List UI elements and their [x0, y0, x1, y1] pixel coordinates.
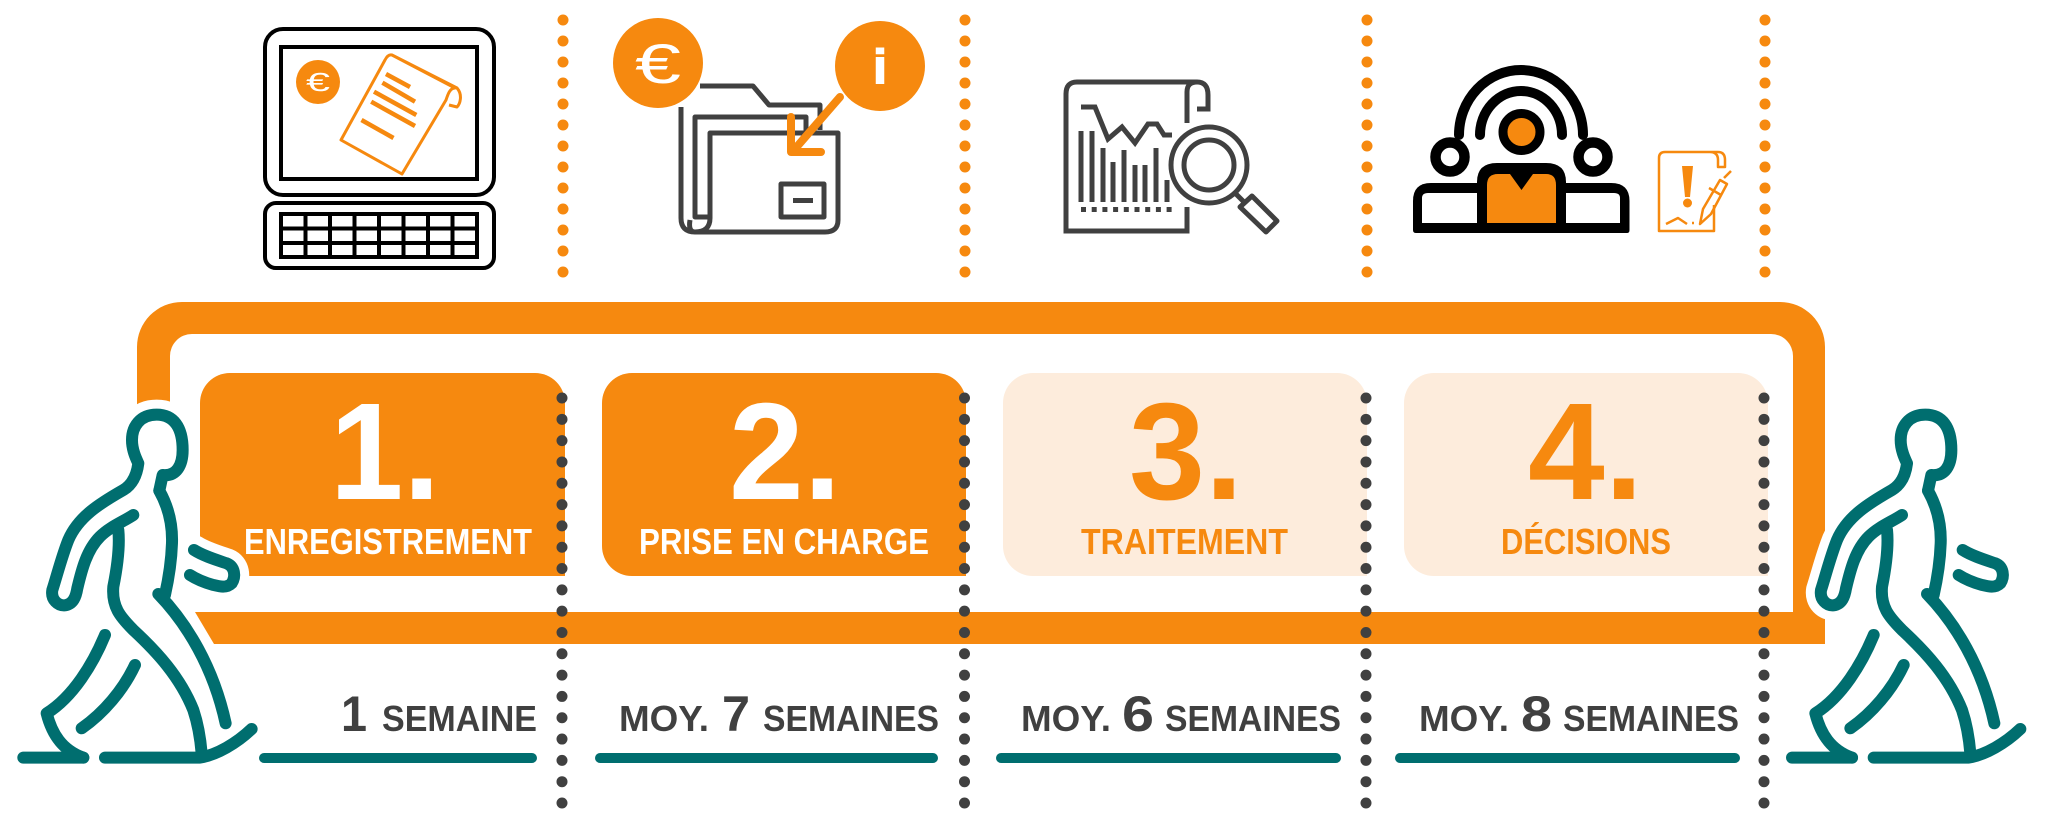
duration 2: SEMAINES: [763, 698, 939, 739]
icon: signed document: [1659, 152, 1731, 231]
walker left: [23, 415, 252, 758]
duration 2: 7: [722, 686, 750, 742]
duration 4: 8: [1521, 686, 1552, 742]
icon: computer with invoice: [265, 29, 494, 268]
duration 1: SEMAINE: [382, 698, 537, 739]
icon: folder with euro and info: [613, 18, 925, 232]
duration 3: MOY.: [1021, 698, 1111, 739]
timeline bars: [259, 753, 1740, 763]
duration 3: SEMAINES: [1165, 698, 1341, 739]
icon: folder with euro and info: €: [635, 32, 681, 95]
duration 3: [1021, 686, 1341, 742]
duration 4: [1419, 686, 1739, 742]
icon: computer with invoice: €: [306, 67, 331, 97]
step 2 label: PRISE EN CHARGE: [639, 521, 929, 562]
orange frame: [137, 302, 1825, 644]
step box 1: [200, 373, 565, 576]
duration 4: MOY.: [1419, 698, 1509, 739]
step box 4: [1404, 373, 1768, 576]
dark dotted separators: [562, 398, 1764, 806]
walker right: [1792, 415, 2020, 758]
icon: meeting people: [1413, 70, 1630, 233]
step box 2: [602, 373, 966, 576]
step 3 label: TRAITEMENT: [1081, 521, 1288, 562]
duration 1: [341, 686, 537, 742]
step 1 label: ENREGISTREMENT: [244, 521, 532, 562]
step 2 number: 2.: [729, 375, 841, 529]
step 3 number: 3.: [1129, 375, 1243, 529]
duration 4: SEMAINES: [1563, 698, 1739, 739]
step 1 number: 1.: [330, 375, 440, 529]
duration 1: 1: [341, 686, 367, 742]
icon: folder with euro and info: i: [873, 40, 887, 93]
step 4 number: 4.: [1528, 375, 1643, 529]
step 4 label: DÉCISIONS: [1501, 521, 1671, 562]
icon: chart with magnifier: [1066, 82, 1277, 232]
step box 3: [1003, 373, 1367, 576]
duration 2: MOY.: [619, 698, 709, 739]
duration 3: 6: [1122, 686, 1154, 742]
duration 2: [619, 686, 939, 742]
orange dotted separators: [558, 14, 1770, 278]
